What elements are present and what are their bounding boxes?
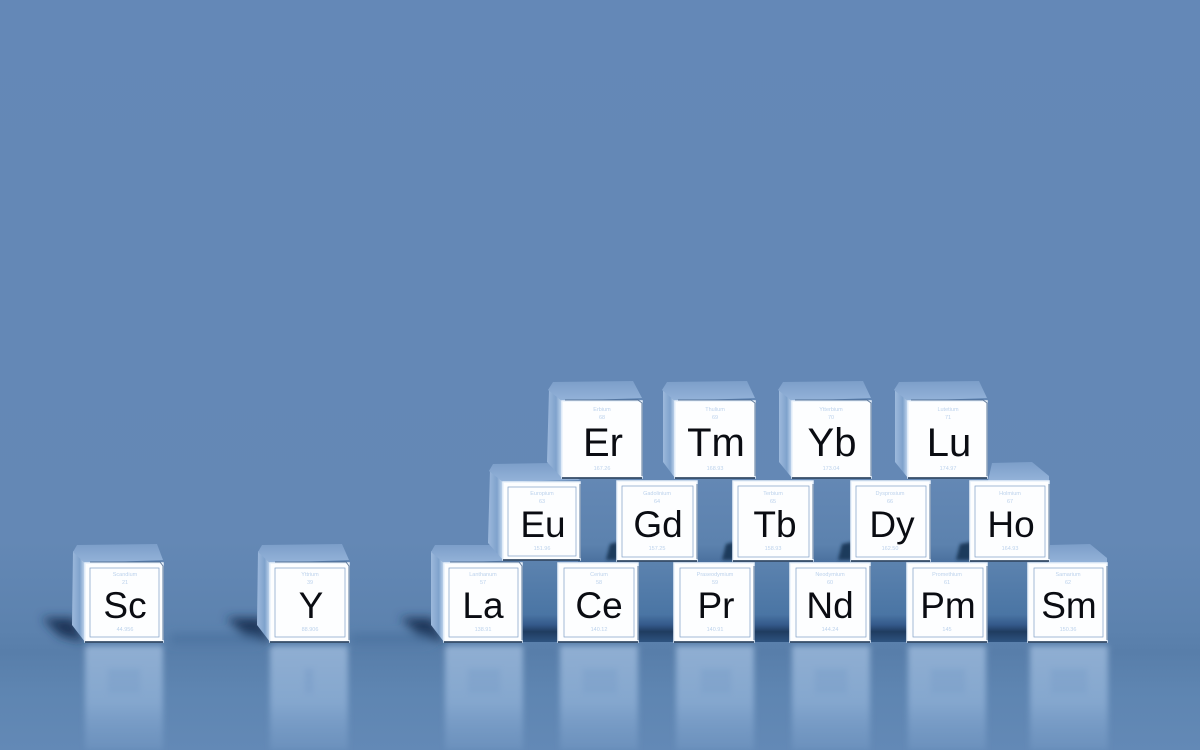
- cube: Samarium: [1028, 544, 1107, 642]
- cube: Lanthanum: 57: [480, 580, 486, 586]
- cube: Cerium: Cerium: [590, 572, 608, 578]
- cube: Terbium: Terbium: [763, 491, 783, 497]
- cube: Yttrium: [257, 544, 349, 642]
- cube: Thulium: Thulium: [705, 407, 725, 413]
- cube: Ytterbium: 173.04: [823, 466, 839, 472]
- cube: Yttrium: 88.906: [302, 627, 318, 633]
- cube: Terbium: [733, 481, 813, 561]
- symbol: Yb: Yb: [808, 421, 856, 465]
- symbol: Sm: Sm: [1041, 585, 1097, 626]
- cube: Europium: 63: [539, 499, 545, 505]
- cube: Neodymium: [790, 563, 870, 642]
- cube: Neodymium: Neodymium: [815, 572, 845, 578]
- cube: Lutetium: 71: [945, 415, 951, 421]
- cube: Praseodymium: 59: [712, 580, 718, 586]
- cube: Ytterbium: 70: [828, 415, 834, 421]
- shaded gaps between stacked cubes: [520, 476, 1030, 642]
- cube: Ytterbium: [778, 381, 871, 478]
- symbol: Ce: Ce: [575, 585, 623, 626]
- symbol: Lu: Lu: [927, 421, 971, 465]
- cube: Dysprosium: [851, 481, 930, 561]
- cube: Neodymium: 144.24: [822, 627, 838, 633]
- cube: Promethium: 61: [944, 580, 950, 586]
- cube: Erbium: 167.26: [594, 466, 610, 472]
- cube: Thulium: [662, 381, 755, 478]
- cube: Europium: [488, 463, 580, 560]
- cube: Holmium: 67: [1007, 499, 1013, 505]
- cube: Erbium: 68: [599, 415, 605, 421]
- symbol: Tm: Tm: [687, 421, 745, 465]
- cube: Thulium: 168.93: [707, 466, 723, 472]
- cube: Europium: Europium: [530, 491, 554, 497]
- cube: Cerium: [558, 563, 638, 642]
- cube: Promethium: Promethium: [932, 572, 962, 578]
- cube: Erbium: Erbium: [593, 407, 611, 413]
- symbol: Eu: Eu: [520, 504, 566, 545]
- symbol: Tb: Tb: [753, 504, 797, 545]
- symbol: Gd: Gd: [633, 504, 683, 545]
- symbol: Pr: Pr: [698, 585, 734, 626]
- cube: Samarium: Samarium: [1055, 572, 1081, 578]
- symbol: La: La: [462, 585, 504, 626]
- cube: Lutetium: [894, 381, 987, 478]
- cube: Erbium: [547, 381, 642, 478]
- symbol: Nd: Nd: [806, 585, 854, 626]
- cube: Cerium: 58: [596, 580, 602, 586]
- cube: Yttrium: Yttrium: [301, 572, 319, 578]
- symbol: Y: Y: [299, 585, 323, 626]
- cube: Promethium: [907, 563, 987, 642]
- cube: Terbium: 158.93: [765, 546, 781, 552]
- cube: Scandium: Scandium: [113, 572, 138, 578]
- cube: Lanthanum: 138.91: [475, 627, 491, 633]
- symbol: Sc: Sc: [103, 585, 147, 626]
- cube: Holmium: Holmium: [999, 491, 1021, 497]
- cube: Scandium: [72, 544, 163, 642]
- cube: Scandium: 44.956: [117, 627, 133, 633]
- cube: Dysprosium: Dysprosium: [875, 491, 905, 497]
- symbol: Ho: Ho: [987, 504, 1035, 545]
- cube: Dysprosium: 66: [887, 499, 893, 505]
- cube: Lutetium: 174.97: [940, 466, 956, 472]
- cube: Samarium: 150.36: [1060, 627, 1076, 633]
- cube: Cerium: 140.12: [591, 627, 607, 633]
- cube: Praseodymium: [674, 563, 754, 642]
- cube: Lanthanum: Lanthanum: [469, 572, 497, 578]
- cube: Terbium: 65: [770, 499, 776, 505]
- cube: Samarium: 62: [1065, 580, 1071, 586]
- cube: Gadolinium: Gadolinium: [643, 491, 671, 497]
- cube: Yttrium: 39: [307, 580, 313, 586]
- cube: Dysprosium: 162.50: [882, 546, 898, 552]
- symbol: Dy: Dy: [869, 504, 915, 545]
- cube: Lutetium: Lutetium: [937, 407, 959, 413]
- cube: Gadolinium: 157.25: [649, 546, 665, 552]
- cube: Gadolinium: 64: [654, 499, 660, 505]
- cube: Thulium: 69: [712, 415, 718, 421]
- cube: Promethium: 145: [942, 627, 952, 633]
- cube: Neodymium: 60: [827, 580, 833, 586]
- cube: Holmium: 164.93: [1002, 546, 1018, 552]
- cube: Holmium: [970, 462, 1049, 561]
- cube: Gadolinium: [617, 481, 697, 561]
- cube: Scandium: 21: [122, 580, 128, 586]
- cube: Europium: 151.96: [534, 546, 550, 552]
- cube: Praseodymium: Praseodymium: [697, 572, 734, 578]
- cast shadows on the floor: [42, 618, 444, 644]
- symbol: Pm: Pm: [920, 585, 976, 626]
- floor reflections: [85, 646, 1108, 750]
- cube: Ytterbium: Ytterbium: [819, 407, 843, 413]
- symbol: Er: Er: [583, 421, 623, 465]
- cube: Praseodymium: 140.91: [707, 627, 723, 633]
- cube: Lanthanum: [431, 545, 522, 642]
